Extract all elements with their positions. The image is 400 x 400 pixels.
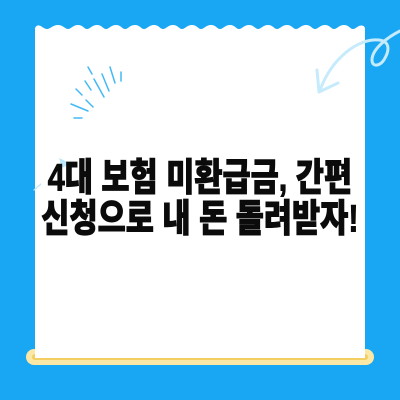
white card with wavy top <box>35 25 365 358</box>
arrow: curly arrow <box>317 31 400 92</box>
title <box>41 156 359 240</box>
title line 1: 4대 보험 미환급금, 간편 <box>48 156 352 199</box>
small arrow remnants behind heading <box>34 159 70 190</box>
title line 2: 신청으로 내 돈 돌려받자! <box>41 197 359 240</box>
icon: sparkle lines <box>71 67 121 118</box>
yellow underline bar <box>26 349 374 365</box>
